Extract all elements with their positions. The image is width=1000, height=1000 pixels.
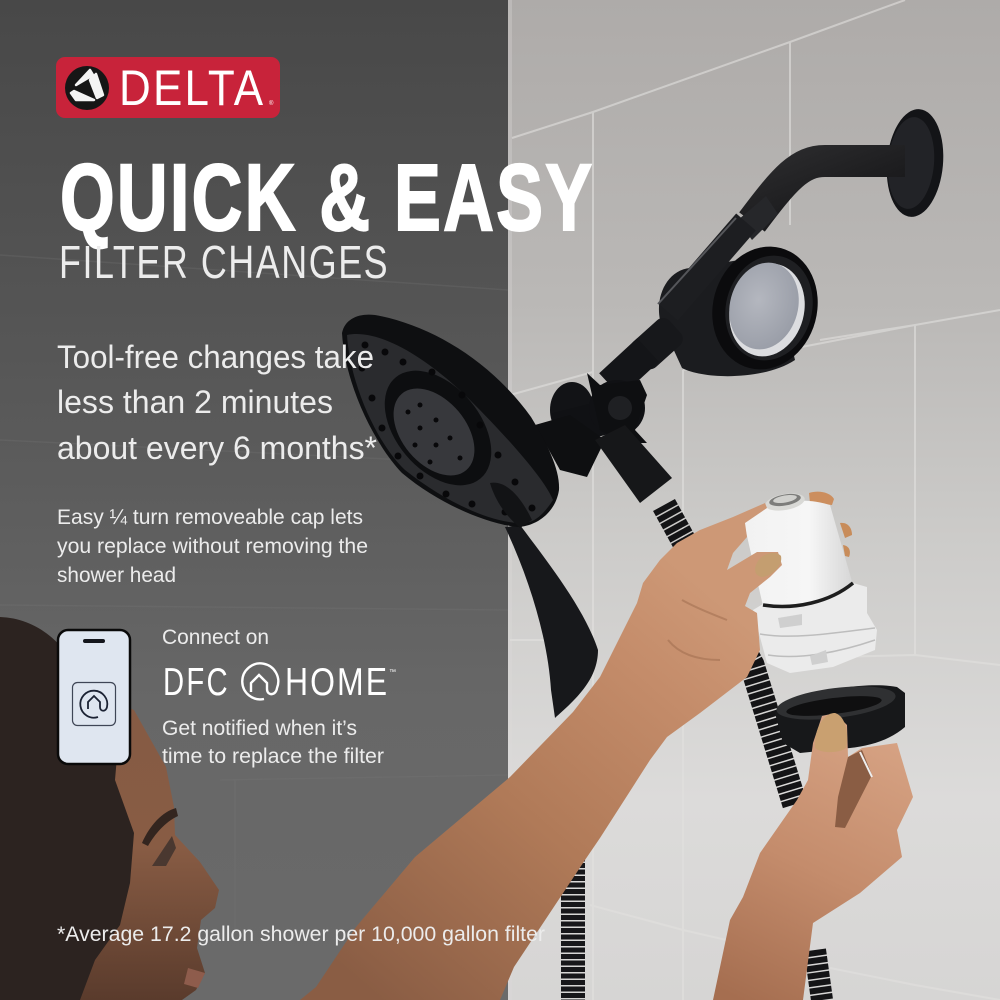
main text block: about every 6 months* xyxy=(57,430,377,466)
app connect block xyxy=(162,626,396,768)
woman head and hair xyxy=(0,617,219,1000)
hose: lower right section xyxy=(815,950,822,1000)
secondary text block xyxy=(57,506,368,587)
secondary text block: Easy ¼ turn removeable cap lets xyxy=(57,506,363,529)
panel: dark text backdrop xyxy=(0,0,508,1000)
filter housing xyxy=(627,218,831,381)
app connect block: Get notified when it’s xyxy=(162,717,357,740)
hose: lower left section xyxy=(561,850,585,1000)
Delta logo xyxy=(56,57,280,118)
arm and hand holding filter, back fingers xyxy=(809,492,852,557)
handle xyxy=(505,525,598,718)
head back shell xyxy=(342,315,559,527)
main text block xyxy=(57,339,377,466)
shower arm and flange xyxy=(738,107,948,240)
subtitle: FILTER CHANGES xyxy=(59,237,389,288)
footnote: *Average 17.2 gallon shower per 10,000 gallon filter xyxy=(57,923,545,946)
title: QUICK & EASY xyxy=(60,144,594,250)
DFC Home wordmark: HOME xyxy=(285,660,389,704)
arm and hand holding filter xyxy=(300,503,782,1000)
app connect block: time to replace the filter xyxy=(162,745,384,768)
icon: phone with app xyxy=(58,630,130,764)
main text block: Tool-free changes take xyxy=(57,339,374,375)
head inner dome xyxy=(363,350,513,506)
head face xyxy=(347,334,553,523)
secondary text block: shower head xyxy=(57,564,176,587)
DFC Home wordmark xyxy=(163,660,396,704)
hand holding cap xyxy=(713,713,913,1000)
head centre plate xyxy=(377,373,491,491)
filter cap xyxy=(775,681,905,753)
DFC Home wordmark: ™ xyxy=(389,669,396,676)
spray jets xyxy=(358,342,536,516)
app connect block: Connect on xyxy=(162,626,269,649)
Delta logo: ® xyxy=(269,100,274,107)
DFC Home wordmark: DFC xyxy=(163,661,230,704)
main text block: less than 2 minutes xyxy=(57,384,333,420)
filter cartridge xyxy=(744,491,877,673)
diverter bracket xyxy=(535,350,672,503)
hose: upper section xyxy=(664,505,795,805)
logo wordmark: DELTA xyxy=(119,59,265,116)
logo mark xyxy=(65,66,109,110)
handheld shower head xyxy=(342,315,598,718)
handle neck xyxy=(490,483,532,528)
secondary text block: you replace without removing the xyxy=(57,535,368,558)
panel: tile wall background xyxy=(508,0,1000,1000)
